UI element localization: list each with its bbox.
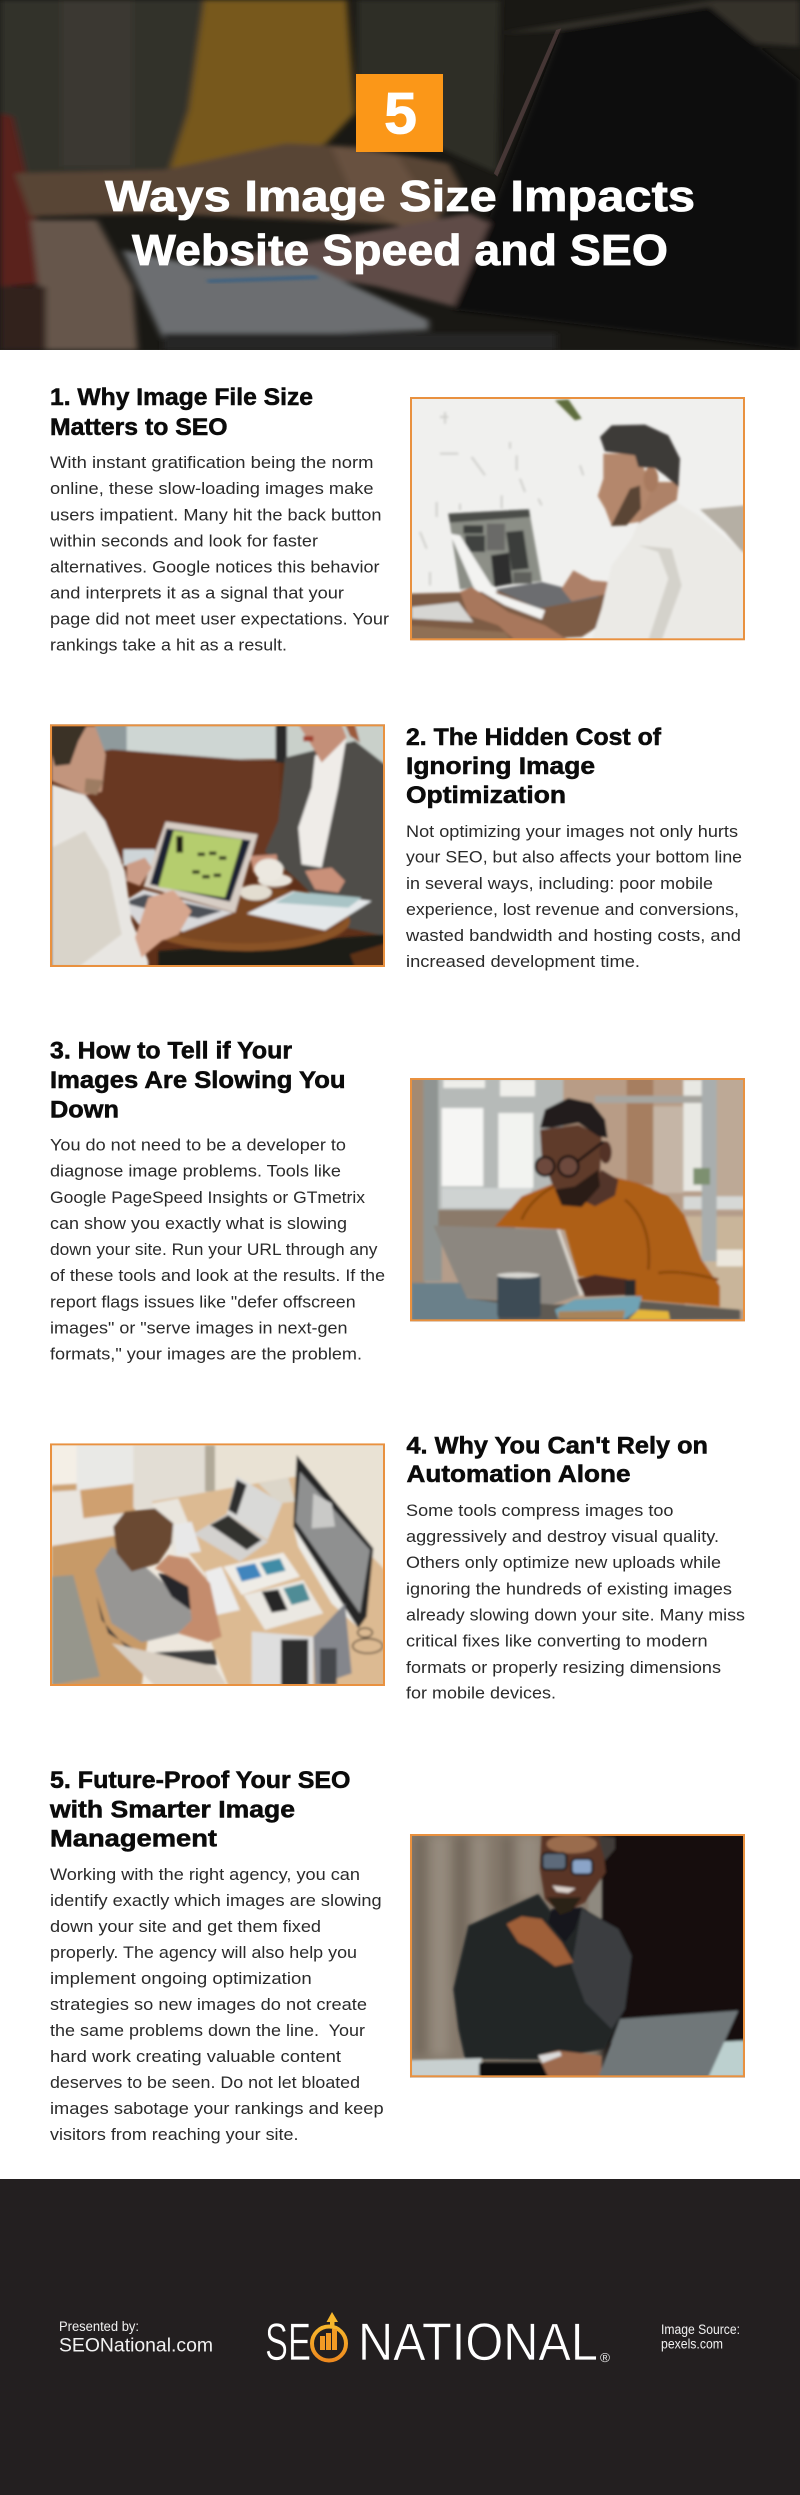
body text 1: With instant gratification being the norm: [50, 454, 374, 472]
body text 5: down your site and get them fixed: [50, 1918, 321, 1936]
body text 4: aggressively and destroy visual quality.: [406, 1528, 719, 1546]
body text 1: within seconds and look for faster: [49, 532, 319, 550]
panel: section 3: [50, 1038, 752, 1364]
body text 3: [50, 1136, 385, 1364]
body text 2: Not optimizing your images not only hurts: [406, 823, 738, 841]
heading 3: [50, 1038, 346, 1124]
heading 4: 4. Why You Can't Rely on: [406, 1433, 708, 1460]
photo: overhead desk with monitor and laptops: [45, 1440, 392, 1693]
body text 5: implement ongoing optimization: [50, 1970, 312, 1988]
body text 1: online, these slow-loading images make: [50, 480, 374, 498]
panel: section 5: [49, 1767, 752, 2144]
body text 3: You do not need to be a developer to: [50, 1136, 346, 1154]
body text 5: visitors from reaching your site.: [50, 2126, 298, 2144]
body text 5: deserves to be seen. Do not let bloated: [50, 2074, 360, 2092]
body text 1: alternatives. Google notices this behavior: [50, 558, 380, 576]
heading 2: [406, 724, 662, 809]
footer band: [0, 2179, 800, 2495]
image source credit: Image Source:: [661, 2322, 740, 2337]
body text 4: critical fixes like converting to modern: [406, 1632, 708, 1650]
heading 3: Down: [50, 1097, 119, 1124]
body text 5: strategies so new images do not create: [50, 1996, 367, 2014]
presented by credit: SEONational.com: [59, 2335, 213, 2357]
body text 1: rankings take a hit as a result.: [50, 637, 287, 655]
heading 3: Images Are Slowing You: [50, 1067, 346, 1094]
title: Ways Image Size Impacts: [105, 172, 695, 221]
body text 1: users impatient. Many hit the back button: [50, 506, 382, 524]
body text 5: hard work creating valuable content: [50, 2048, 341, 2066]
heading 4: [406, 1433, 708, 1488]
heading 5: 5. Future-Proof Your SEO: [50, 1767, 350, 1794]
heading 2: 2. The Hidden Cost of: [406, 724, 662, 751]
presented by credit: [59, 2319, 213, 2357]
hero background photo: [0, 0, 800, 350]
title: [105, 172, 695, 275]
heading 2: Optimization: [406, 782, 566, 809]
body text 4: already slowing down your site. Many miss: [406, 1607, 745, 1625]
hero banner: [0, 0, 800, 350]
title: Website Speed and SEO: [132, 226, 668, 275]
logo: SEO National: SE: [265, 2313, 311, 2372]
logo: SEO National: NATIONAL: [358, 2313, 598, 2372]
heading 2: Ignoring Image: [406, 753, 595, 780]
body text 3: diagnose image problems. Tools like: [50, 1163, 341, 1181]
heading 5: with Smarter Image: [49, 1797, 295, 1824]
body text 3: of these tools and look at the results. If the: [50, 1267, 385, 1285]
heading 1: Matters to SEO: [50, 414, 228, 441]
body text 5: properly. The agency will also help you: [50, 1944, 357, 1962]
logo: SEO National: ®: [600, 2350, 610, 2365]
badge: number 5: 5: [384, 82, 417, 146]
icon: orange ring with bars and arrow: [312, 2312, 346, 2360]
body text 3: report flags issues like "defer offscreen: [50, 1293, 356, 1311]
body text 2: in several ways, including: poor mobile: [406, 875, 713, 893]
body text 5: images sabotage your rankings and keep: [50, 2100, 384, 2118]
body text 2: wasted bandwidth and hosting costs, and: [405, 927, 741, 945]
photo: man in dark sweater with glasses: [410, 1834, 745, 2078]
body text 3: formats," your images are the problem.: [50, 1346, 362, 1364]
body text 3: Google PageSpeed Insights or GTmetrix: [50, 1189, 366, 1207]
body text 5: identify exactly which images are slowing: [50, 1892, 382, 1910]
body text 1: page did not meet user expectations. Your: [50, 611, 390, 629]
body text 4: [406, 1502, 745, 1703]
body text 2: [405, 823, 742, 971]
photo: meeting with laptop at cafe table: [45, 721, 392, 974]
body text 3: can show you exactly what is slowing: [50, 1215, 347, 1233]
panel: section 4: [45, 1433, 745, 1703]
body text 4: Others only optimize new uploads while: [406, 1554, 721, 1572]
heading 1: 1. Why Image File Size: [50, 384, 313, 411]
image source credit: pexels.com: [661, 2337, 723, 2352]
body text 4: Some tools compress images too: [406, 1502, 674, 1520]
body text 3: images" or "serve images in next-gen: [50, 1320, 348, 1338]
panel: section 1: [49, 384, 752, 655]
body text 2: experience, lost revenue and conversions,: [406, 901, 739, 919]
body text 1: [49, 454, 390, 655]
body text 2: increased development time.: [406, 953, 640, 971]
body text 4: ignoring the hundreds of existing images: [406, 1580, 732, 1598]
heading 5: [49, 1767, 351, 1853]
body text 4: formats or properly resizing dimensions: [406, 1659, 721, 1677]
photo: man in orange sweater with laptop: [405, 1073, 752, 1326]
body text 5: the same problems down the line. Your: [50, 2022, 366, 2040]
body text 5: [50, 1866, 384, 2144]
body text 4: for mobile devices.: [406, 1685, 556, 1703]
body text 3: down your site. Run your URL through any: [50, 1241, 378, 1259]
heading 3: 3. How to Tell if Your: [50, 1038, 292, 1065]
body text 2: your SEO, but also affects your bottom line: [406, 848, 742, 866]
body text 5: Working with the right agency, you can: [50, 1866, 360, 1884]
body text 1: and interprets it as a signal that your: [50, 584, 345, 602]
badge: number 5: [356, 74, 443, 152]
heading 4: Automation Alone: [406, 1461, 630, 1488]
heading 5: Management: [50, 1826, 217, 1853]
photo: man with laptop reading paper: [405, 392, 752, 645]
presented by credit: Presented by:: [59, 2319, 139, 2334]
image source credit: [661, 2322, 740, 2352]
panel: section 2: [45, 721, 742, 974]
heading 1: [50, 384, 313, 441]
